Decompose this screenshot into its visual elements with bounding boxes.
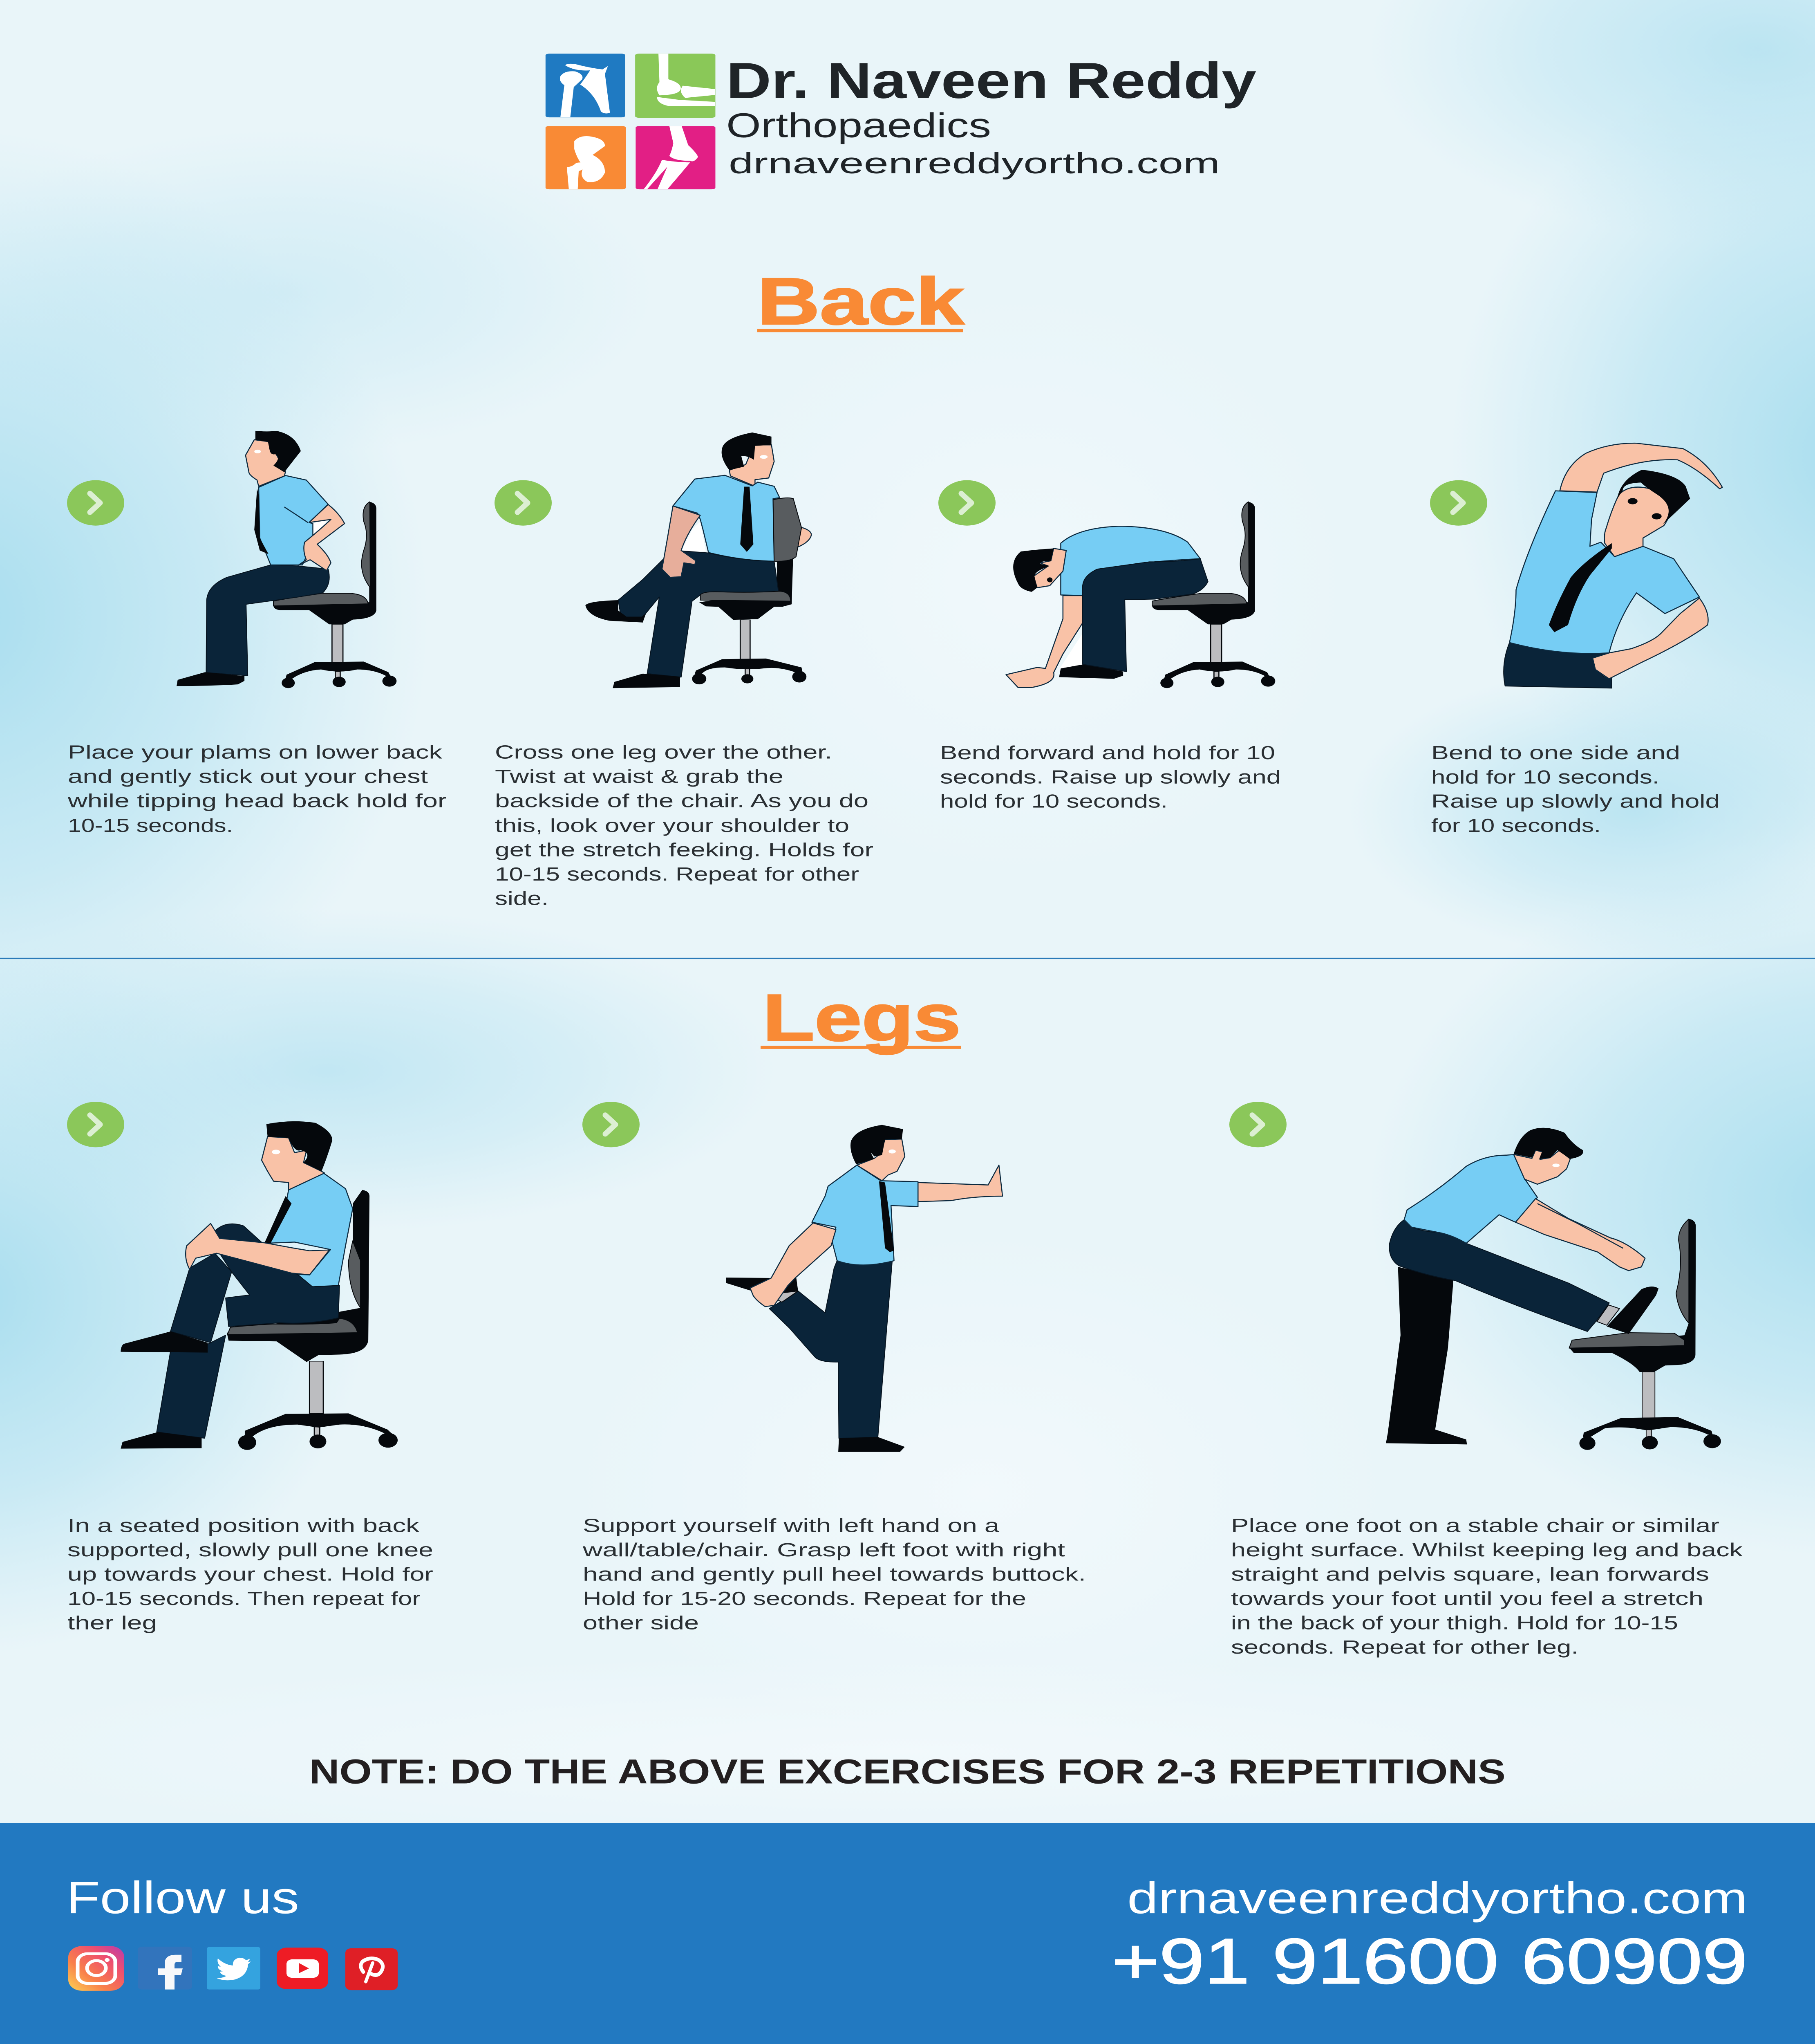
text: legs instruction 2 [582, 1515, 1086, 1634]
icon: elbow [635, 54, 715, 118]
icon: shoulder [546, 54, 625, 117]
text: legs instruction 1: up towards your chest. Hold for [67, 1564, 433, 1585]
text: legs instruction 3: towards your foot until you feel a stretch [1231, 1589, 1703, 1609]
panel: legs exercise 3 [1229, 1102, 1743, 1658]
text: legs instruction 1 [67, 1515, 433, 1634]
text: instruction 2: Cross one leg over the other. [495, 742, 832, 763]
illustration: seated back arch [177, 431, 396, 688]
icon: knee [636, 126, 715, 189]
illustration: seated twist [585, 433, 811, 688]
text: instruction 1: while tipping head back hold for [67, 791, 447, 811]
note: repetitions: NOTE: DO THE ABOVE EXCERCISES FOR 2-3 REPETITIONS [309, 1753, 1506, 1791]
icon: youtube [277, 1948, 328, 1989]
panel: back exercise 3 [938, 480, 1281, 812]
text: legs instruction 3: seconds. Repeat for other leg. [1231, 1637, 1578, 1658]
footer band [0, 1823, 1815, 2044]
text: instruction 4: for 10 seconds. [1431, 815, 1601, 836]
icon: facebook [138, 1947, 192, 1990]
icon: arrow badge [67, 480, 124, 526]
text: instruction 4: hold for 10 seconds. [1431, 767, 1659, 788]
illustration: side bend [1504, 443, 1722, 688]
illustration: standing quad stretch [726, 1125, 1003, 1452]
text: instruction 2: Twist at waist & grab the [495, 766, 783, 787]
text: instruction 1: 10-15 seconds. [68, 815, 233, 836]
icon: arrow badge [938, 480, 996, 526]
panel: back exercise 4 [1430, 443, 1722, 836]
text: instruction 1: and gently stick out your chest [68, 766, 428, 787]
icon: arrow badge [495, 480, 552, 526]
text: legs instruction 2: Support yourself with left hand on a [583, 1515, 1000, 1536]
icon: pinterest [345, 1948, 398, 1990]
text: instruction 2: get the stretch feeking. Holds for [495, 840, 873, 861]
illustration: knee to chest [121, 1121, 398, 1450]
text: legs instruction 3: Place one foot on a stable chair or similar [1231, 1515, 1719, 1536]
text: instruction 2 [495, 742, 873, 909]
icon: instagram [68, 1946, 124, 1991]
heading: Legs: Legs [763, 981, 961, 1055]
text: instruction 2: side. [495, 888, 548, 909]
panel: back exercise 2 [495, 433, 873, 909]
text: instruction 2: backside of the chair. As you do [495, 791, 868, 811]
text: instruction 4: Bend to one side and [1431, 743, 1680, 764]
text: legs instruction 2: hand and gently pull heel towards buttock. [583, 1564, 1086, 1585]
icon: arrow badge [1229, 1102, 1287, 1147]
text: legs instruction 2: wall/table/chair. Grasp left foot with right [582, 1540, 1065, 1561]
illustration: forward bend [1006, 502, 1275, 688]
text: legs instruction 1: 10-15 seconds. Then repeat for [67, 1589, 421, 1609]
text: legs instruction 1: In a seated position with back [67, 1515, 420, 1536]
icon: twitter [207, 1947, 260, 1990]
text: legs instruction 2: Hold for 15-20 seconds. Repeat for the [583, 1589, 1026, 1609]
footer: follow us: Follow us [66, 1872, 299, 1923]
logo: clinic name: Dr. Naveen Reddy [726, 52, 1256, 109]
text: instruction 3: hold for 10 seconds. [940, 791, 1168, 812]
text: instruction 1 [67, 742, 447, 836]
text: legs instruction 3: straight and pelvis square, lean forwards [1231, 1564, 1709, 1585]
icon: hip [546, 126, 626, 189]
footer: phone: +91 91600 60909 [1112, 1925, 1748, 1997]
text: legs instruction 1: ther leg [67, 1613, 157, 1634]
text: instruction 1: Place your plams on lower back [68, 742, 443, 763]
text: instruction 3: seconds. Raise up slowly and [940, 767, 1281, 788]
panel: legs exercise 1 [67, 1102, 433, 1634]
text: legs instruction 1: supported, slowly pull one knee [67, 1540, 433, 1561]
text: instruction 2: this, look over your shoulder to [495, 815, 849, 836]
heading: Back: Back [757, 264, 965, 338]
logo: speciality: Orthopaedics [726, 106, 991, 145]
text: legs instruction 3: in the back of your thigh. Hold for 10-15 [1231, 1613, 1678, 1634]
text: instruction 2: 10-15 seconds. Repeat for other [495, 864, 859, 885]
footer: website: drnaveenreddyortho.com [1127, 1874, 1748, 1923]
illustration: hamstring stretch on chair [1386, 1128, 1721, 1450]
panel: legs exercise 2 [582, 1102, 1086, 1634]
text: instruction 4 [1431, 743, 1720, 836]
icon: arrow badge [1430, 480, 1487, 526]
text: legs instruction 3: height surface. Whilst keeping leg and back [1231, 1540, 1743, 1561]
text: instruction 3 [940, 743, 1281, 812]
logo: bone icon tiles [546, 54, 715, 189]
text: instruction 3: Bend forward and hold for 10 [940, 743, 1275, 764]
text: instruction 4: Raise up slowly and hold [1431, 791, 1720, 812]
icon: arrow badge [582, 1102, 640, 1147]
logo: website: drnaveenreddyortho.com [729, 147, 1220, 180]
panel: back exercise 1 [67, 431, 447, 836]
icon: arrow badge [67, 1102, 124, 1147]
text: legs instruction 2: other side [583, 1613, 699, 1634]
text: legs instruction 3 [1231, 1515, 1743, 1658]
